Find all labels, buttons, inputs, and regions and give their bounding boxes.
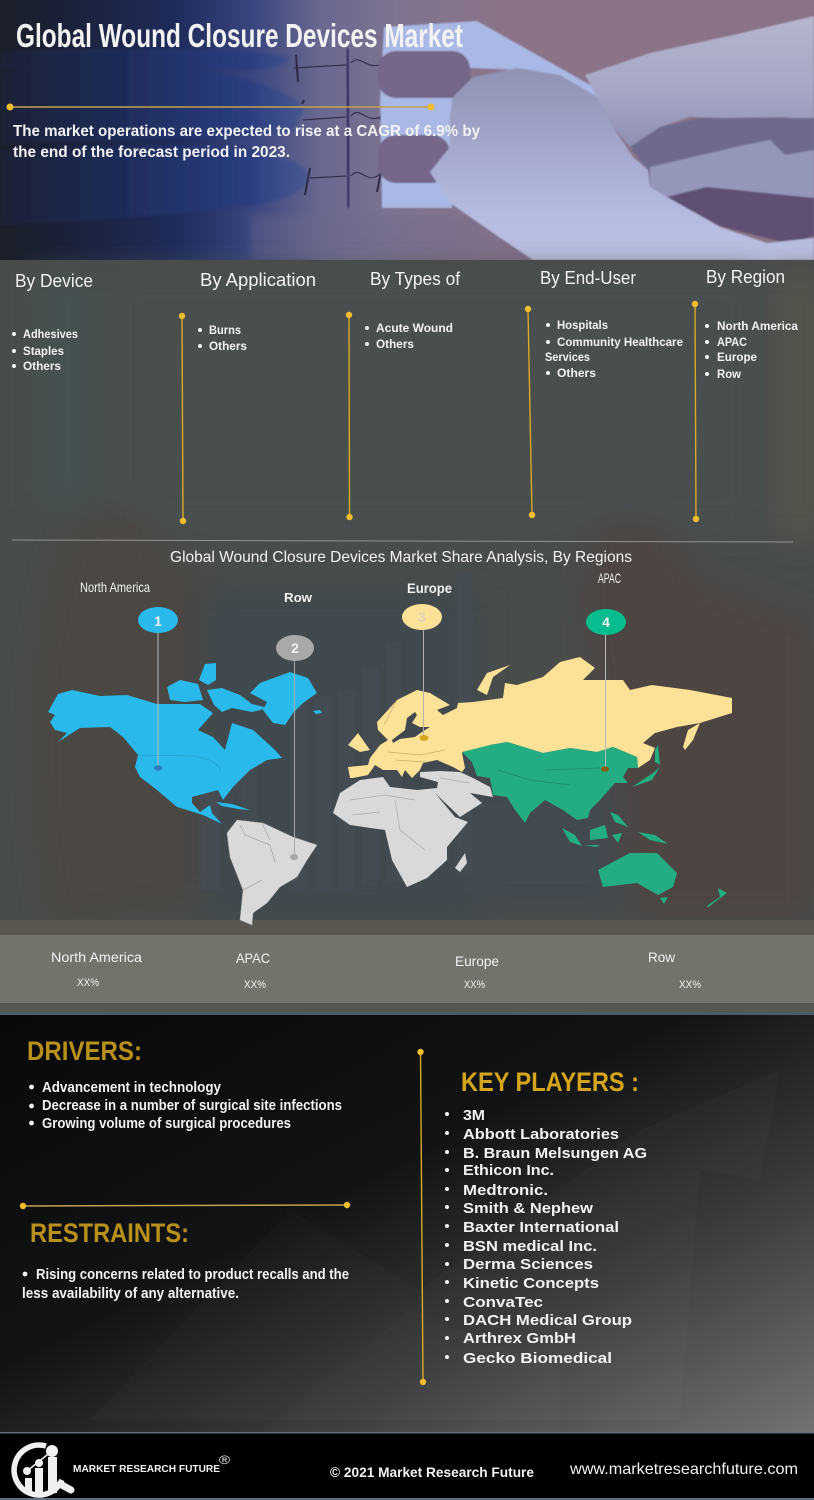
text block: CAGR summary: The market operations are expected to rise at a CAGR of 6.9% by <box>13 123 480 140</box>
list: by application: Others <box>209 339 247 353</box>
list: drivers <box>29 1080 342 1132</box>
legend: regional shares: XX% <box>679 979 701 991</box>
world map <box>48 657 732 925</box>
map: North America <box>48 663 322 824</box>
list: drivers: Growing volume of surgical procedures <box>42 1116 291 1132</box>
icon: logo magnifier <box>14 1445 71 1495</box>
text block: CAGR summary <box>13 123 480 161</box>
list: key players: Ethicon Inc. <box>463 1162 554 1179</box>
logo wordmark <box>73 1453 230 1475</box>
heading: drivers: DRIVERS: <box>27 1036 142 1066</box>
map pin 4: APAC: 4 <box>602 614 610 630</box>
divider: hero <box>6 104 434 110</box>
list: key players: Derma Sciences <box>463 1256 593 1273</box>
list: by region: North America <box>717 319 798 333</box>
list: by types: Others <box>376 337 414 351</box>
list: key players: Medtronic. <box>463 1182 548 1199</box>
panel: segment headings: By End-User <box>540 268 636 288</box>
legend: regional shares: APAC <box>236 950 270 966</box>
list: by region: Row <box>717 367 742 381</box>
map pin 1: North America: North America <box>80 579 150 595</box>
list: by end-user: Community Healthcare <box>557 335 683 349</box>
map: Asia Pacific <box>462 742 727 908</box>
panel: segment headings: By Region <box>706 267 785 287</box>
text block: restraints: Rising concerns related to product recalls and the <box>36 1267 349 1283</box>
list: by device: Others <box>23 359 61 373</box>
footer copyright: © 2021 Market Research Future <box>330 1464 534 1480</box>
text block: restraints <box>22 1267 349 1302</box>
legend: regional shares: XX% <box>464 979 485 991</box>
map pin 3: Europe: Europe <box>407 580 452 596</box>
list: drivers: Decrease in a number of surgical site infections <box>42 1098 342 1114</box>
map pin 2: Row: 2 <box>291 640 299 656</box>
map pin 3: Europe: 3 <box>418 609 426 625</box>
list: key players: Baxter International <box>463 1219 619 1236</box>
list: key players <box>445 1107 647 1367</box>
list: drivers: Advancement in technology <box>42 1080 221 1096</box>
list: by end-user: Others <box>557 366 596 380</box>
map: Europe and Russia <box>348 657 732 778</box>
legend: regional shares <box>51 949 701 991</box>
list: key players: DACH Medical Group <box>463 1312 632 1329</box>
list: by application: Burns <box>209 323 241 337</box>
list: by application <box>198 323 247 353</box>
list: key players: ConvaTec <box>463 1294 543 1311</box>
list: key players: Kinetic Concepts <box>463 1275 599 1292</box>
list: by types <box>365 321 453 351</box>
list: by region: Europe <box>717 350 757 364</box>
divider: drivers and restraints <box>20 1202 350 1209</box>
list: by types: Acute Wound <box>376 321 453 335</box>
list: by end-user: Hospitals <box>557 318 608 332</box>
map pin 2: Row <box>276 590 314 860</box>
legend: regional shares: XX% <box>244 979 266 991</box>
title: Global Wound Closure Devices Market <box>16 17 463 54</box>
list: key players: Arthrex GmbH <box>463 1330 576 1347</box>
list: key players: Abbott Laboratories <box>463 1126 619 1143</box>
panel: footer <box>0 1432 814 1500</box>
heading: key players: KEY PLAYERS : <box>461 1067 639 1097</box>
legend: regional shares: Europe <box>455 953 499 969</box>
legend: regional shares: Row <box>648 949 676 965</box>
list: key players: BSN medical Inc. <box>463 1238 597 1255</box>
logo wordmark: MARKET RESEARCH FUTURE <box>73 1464 220 1475</box>
list: key players: B. Braun Melsungen AG <box>463 1145 647 1162</box>
list: by device: Adhesives <box>23 327 78 341</box>
map pin 1: North America: 1 <box>154 613 162 629</box>
footer website: www.marketresearchfuture.com <box>569 1461 798 1478</box>
map pin 1: North America <box>80 579 178 771</box>
list: by device: Staples <box>23 344 64 358</box>
map pin 4: APAC <box>586 570 626 772</box>
map pin 2: Row: Row <box>284 590 313 605</box>
list: by region: APAC <box>717 335 747 349</box>
map pin 3: Europe <box>402 580 452 741</box>
panel: segment headings: By Application <box>200 270 316 290</box>
vertical divider: key players <box>417 1049 426 1385</box>
panel: segmentation and map background <box>0 260 814 1015</box>
segment separators <box>179 301 699 524</box>
list: key players: Smith & Nephew <box>463 1200 593 1217</box>
text block: CAGR summary: the end of the forecast period in 2023. <box>13 144 290 161</box>
logo wordmark: ® <box>219 1453 230 1467</box>
list: key players: 3M <box>463 1107 485 1124</box>
list: by region <box>705 319 798 381</box>
legend: regional shares: North America <box>51 949 142 965</box>
heading: restraints: RESTRAINTS: <box>30 1218 189 1248</box>
list: by device <box>12 327 78 373</box>
list: by end-user: Services <box>545 350 590 364</box>
text block: restraints: less availability of any alternative. <box>22 1286 239 1302</box>
panel: hero banner <box>0 0 814 260</box>
list: by end-user <box>545 318 683 380</box>
legend: regional shares: XX% <box>77 977 99 989</box>
panel: segment headings <box>15 267 785 291</box>
panel: segment headings: By Device <box>15 271 93 291</box>
list: key players: Gecko Biomedical <box>463 1350 612 1367</box>
map: South America <box>227 820 317 925</box>
panel: segment headings: By Types of <box>370 269 461 289</box>
chart heading: Global Wound Closure Devices Market Share Analysis, By Regions <box>170 549 632 566</box>
map pin 4: APAC: APAC <box>598 570 621 586</box>
panel: drivers, restraints, key players background <box>0 1015 814 1433</box>
map: Africa and Middle East <box>333 771 493 887</box>
